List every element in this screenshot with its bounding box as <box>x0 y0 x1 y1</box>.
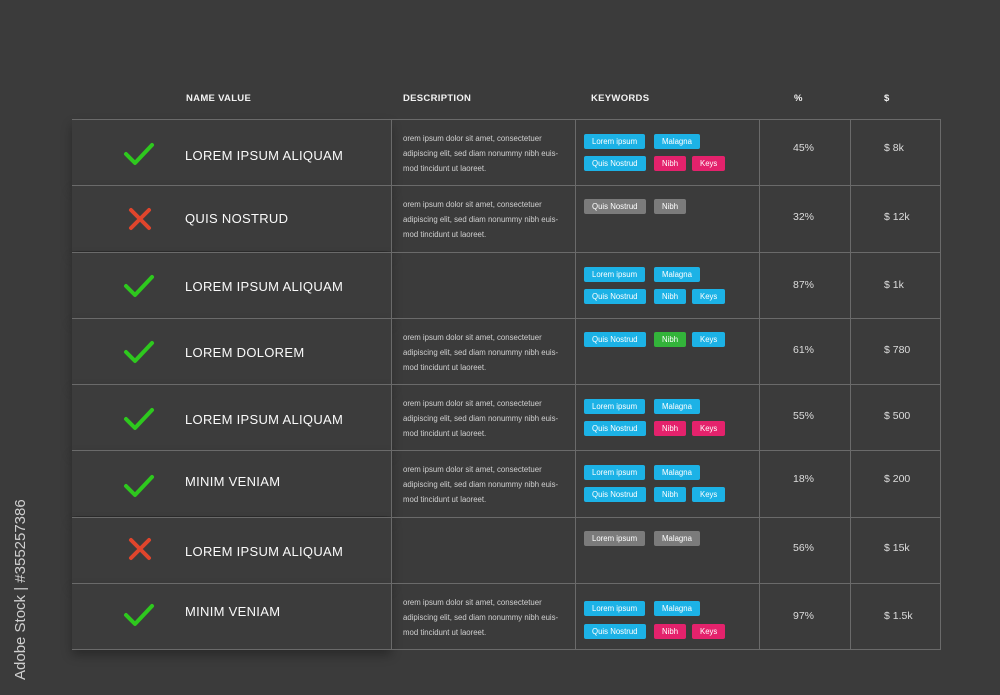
row 8 <box>72 584 913 656</box>
row 3: Keys <box>700 292 717 301</box>
row 4 <box>72 319 910 382</box>
tags <box>584 531 700 546</box>
row 4: Keys <box>700 335 717 344</box>
icon: check <box>124 274 154 298</box>
row 6 <box>72 451 910 517</box>
row 1: Keys <box>700 159 717 168</box>
name: LOREM IPSUM ALIQUAM <box>185 148 343 163</box>
percent: 55% <box>793 410 814 422</box>
percent: 87% <box>793 279 814 291</box>
icon: cross <box>128 538 152 560</box>
percent: 61% <box>793 344 814 356</box>
header: keywords: KEYWORDS <box>591 93 649 104</box>
row 3: Malagna <box>662 270 692 279</box>
row 2: Nibh <box>662 202 678 211</box>
tags <box>584 134 725 171</box>
value: $ 1k <box>884 279 904 291</box>
row 8: Quis Nostrud <box>592 627 638 636</box>
row 1: Malagna <box>662 137 692 146</box>
description: orem ipsum dolor sit amet, consectetuer adipiscing elit, sed diam nonummy nibh euis-mod tincidunt ut laoreet. <box>403 333 558 372</box>
row 3 <box>72 253 904 316</box>
value: $ 8k <box>884 142 904 154</box>
icon: check <box>124 604 154 626</box>
row 5: Quis Nostrud <box>592 424 638 433</box>
row 8: Keys <box>700 627 717 636</box>
name: MINIM VENIAM <box>185 474 280 489</box>
row 6: Nibh <box>662 490 678 499</box>
name: LOREM DOLOREM <box>185 345 304 360</box>
row 7 <box>72 518 910 581</box>
row 2 <box>72 186 910 252</box>
row 5: Keys <box>700 424 717 433</box>
row 5: Nibh <box>662 424 678 433</box>
tags <box>584 199 686 214</box>
description: orem ipsum dolor sit amet, consectetuer adipiscing elit, sed diam nonummy nibh euis-mod tincidunt ut laoreet. <box>403 200 558 239</box>
icon: check <box>124 408 154 430</box>
description: orem ipsum dolor sit amet, consectetuer adipiscing elit, sed diam nonummy nibh euis-mod tincidunt ut laoreet. <box>403 598 558 637</box>
row 8: Malagna <box>662 604 692 613</box>
side stock id text: Adobe Stock | #355257386 <box>12 499 29 680</box>
tags <box>584 332 725 347</box>
header: percent: % <box>794 93 803 104</box>
percent: 18% <box>793 473 814 485</box>
row 6: Keys <box>700 490 717 499</box>
description: orem ipsum dolor sit amet, consectetuer adipiscing elit, sed diam nonummy nibh euis-mod tincidunt ut laoreet. <box>403 399 558 438</box>
row 6: Lorem ipsum <box>592 468 637 477</box>
row 2: Quis Nostrud <box>592 202 638 211</box>
value: $ 200 <box>884 473 910 485</box>
value: $ 780 <box>884 344 910 356</box>
name: LOREM IPSUM ALIQUAM <box>185 412 343 427</box>
value: $ 500 <box>884 410 910 422</box>
row 7: Lorem ipsum <box>592 534 637 543</box>
row 6: Quis Nostrud <box>592 490 638 499</box>
icon: check <box>124 340 154 364</box>
percent: 56% <box>793 542 814 554</box>
tags <box>584 465 725 502</box>
value: $ 15k <box>884 542 910 554</box>
row 3: Quis Nostrud <box>592 292 638 301</box>
row 1: Quis Nostrud <box>592 159 638 168</box>
tags <box>584 601 725 639</box>
percent: 32% <box>793 211 814 223</box>
row 3: Lorem ipsum <box>592 270 637 279</box>
header: name value: NAME VALUE <box>186 93 251 104</box>
row 5: Lorem ipsum <box>592 402 637 411</box>
header: description: DESCRIPTION <box>403 93 471 104</box>
row 8: Nibh <box>662 627 678 636</box>
value: $ 1.5k <box>884 610 913 622</box>
percent: 97% <box>793 610 814 622</box>
icon: check <box>124 474 154 498</box>
row 6: Malagna <box>662 468 692 477</box>
row 5: Malagna <box>662 402 692 411</box>
percent: 45% <box>793 142 814 154</box>
row 4: Quis Nostrud <box>592 335 638 344</box>
name: LOREM IPSUM ALIQUAM <box>185 279 343 294</box>
row 3: Nibh <box>662 292 678 301</box>
tags <box>584 267 725 304</box>
tags <box>584 399 725 436</box>
row 5 <box>72 385 910 448</box>
name: QUIS NOSTRUD <box>185 211 288 226</box>
description: orem ipsum dolor sit amet, consectetuer adipiscing elit, sed diam nonummy nibh euis-mod tincidunt ut laoreet. <box>403 134 558 173</box>
icon: check <box>124 142 154 166</box>
row 7: Malagna <box>662 534 692 543</box>
name: LOREM IPSUM ALIQUAM <box>185 544 343 559</box>
header: dollar: $ <box>884 93 890 104</box>
row 1 <box>72 133 904 183</box>
row 4: Nibh <box>662 335 678 344</box>
row 1: Lorem ipsum <box>592 137 637 146</box>
icon: cross <box>128 208 152 230</box>
row 1: Nibh <box>662 159 678 168</box>
description: orem ipsum dolor sit amet, consectetuer adipiscing elit, sed diam nonummy nibh euis-mod tincidunt ut laoreet. <box>403 465 558 504</box>
name: MINIM VENIAM <box>185 604 280 619</box>
row 8: Lorem ipsum <box>592 604 637 613</box>
value: $ 12k <box>884 211 910 223</box>
